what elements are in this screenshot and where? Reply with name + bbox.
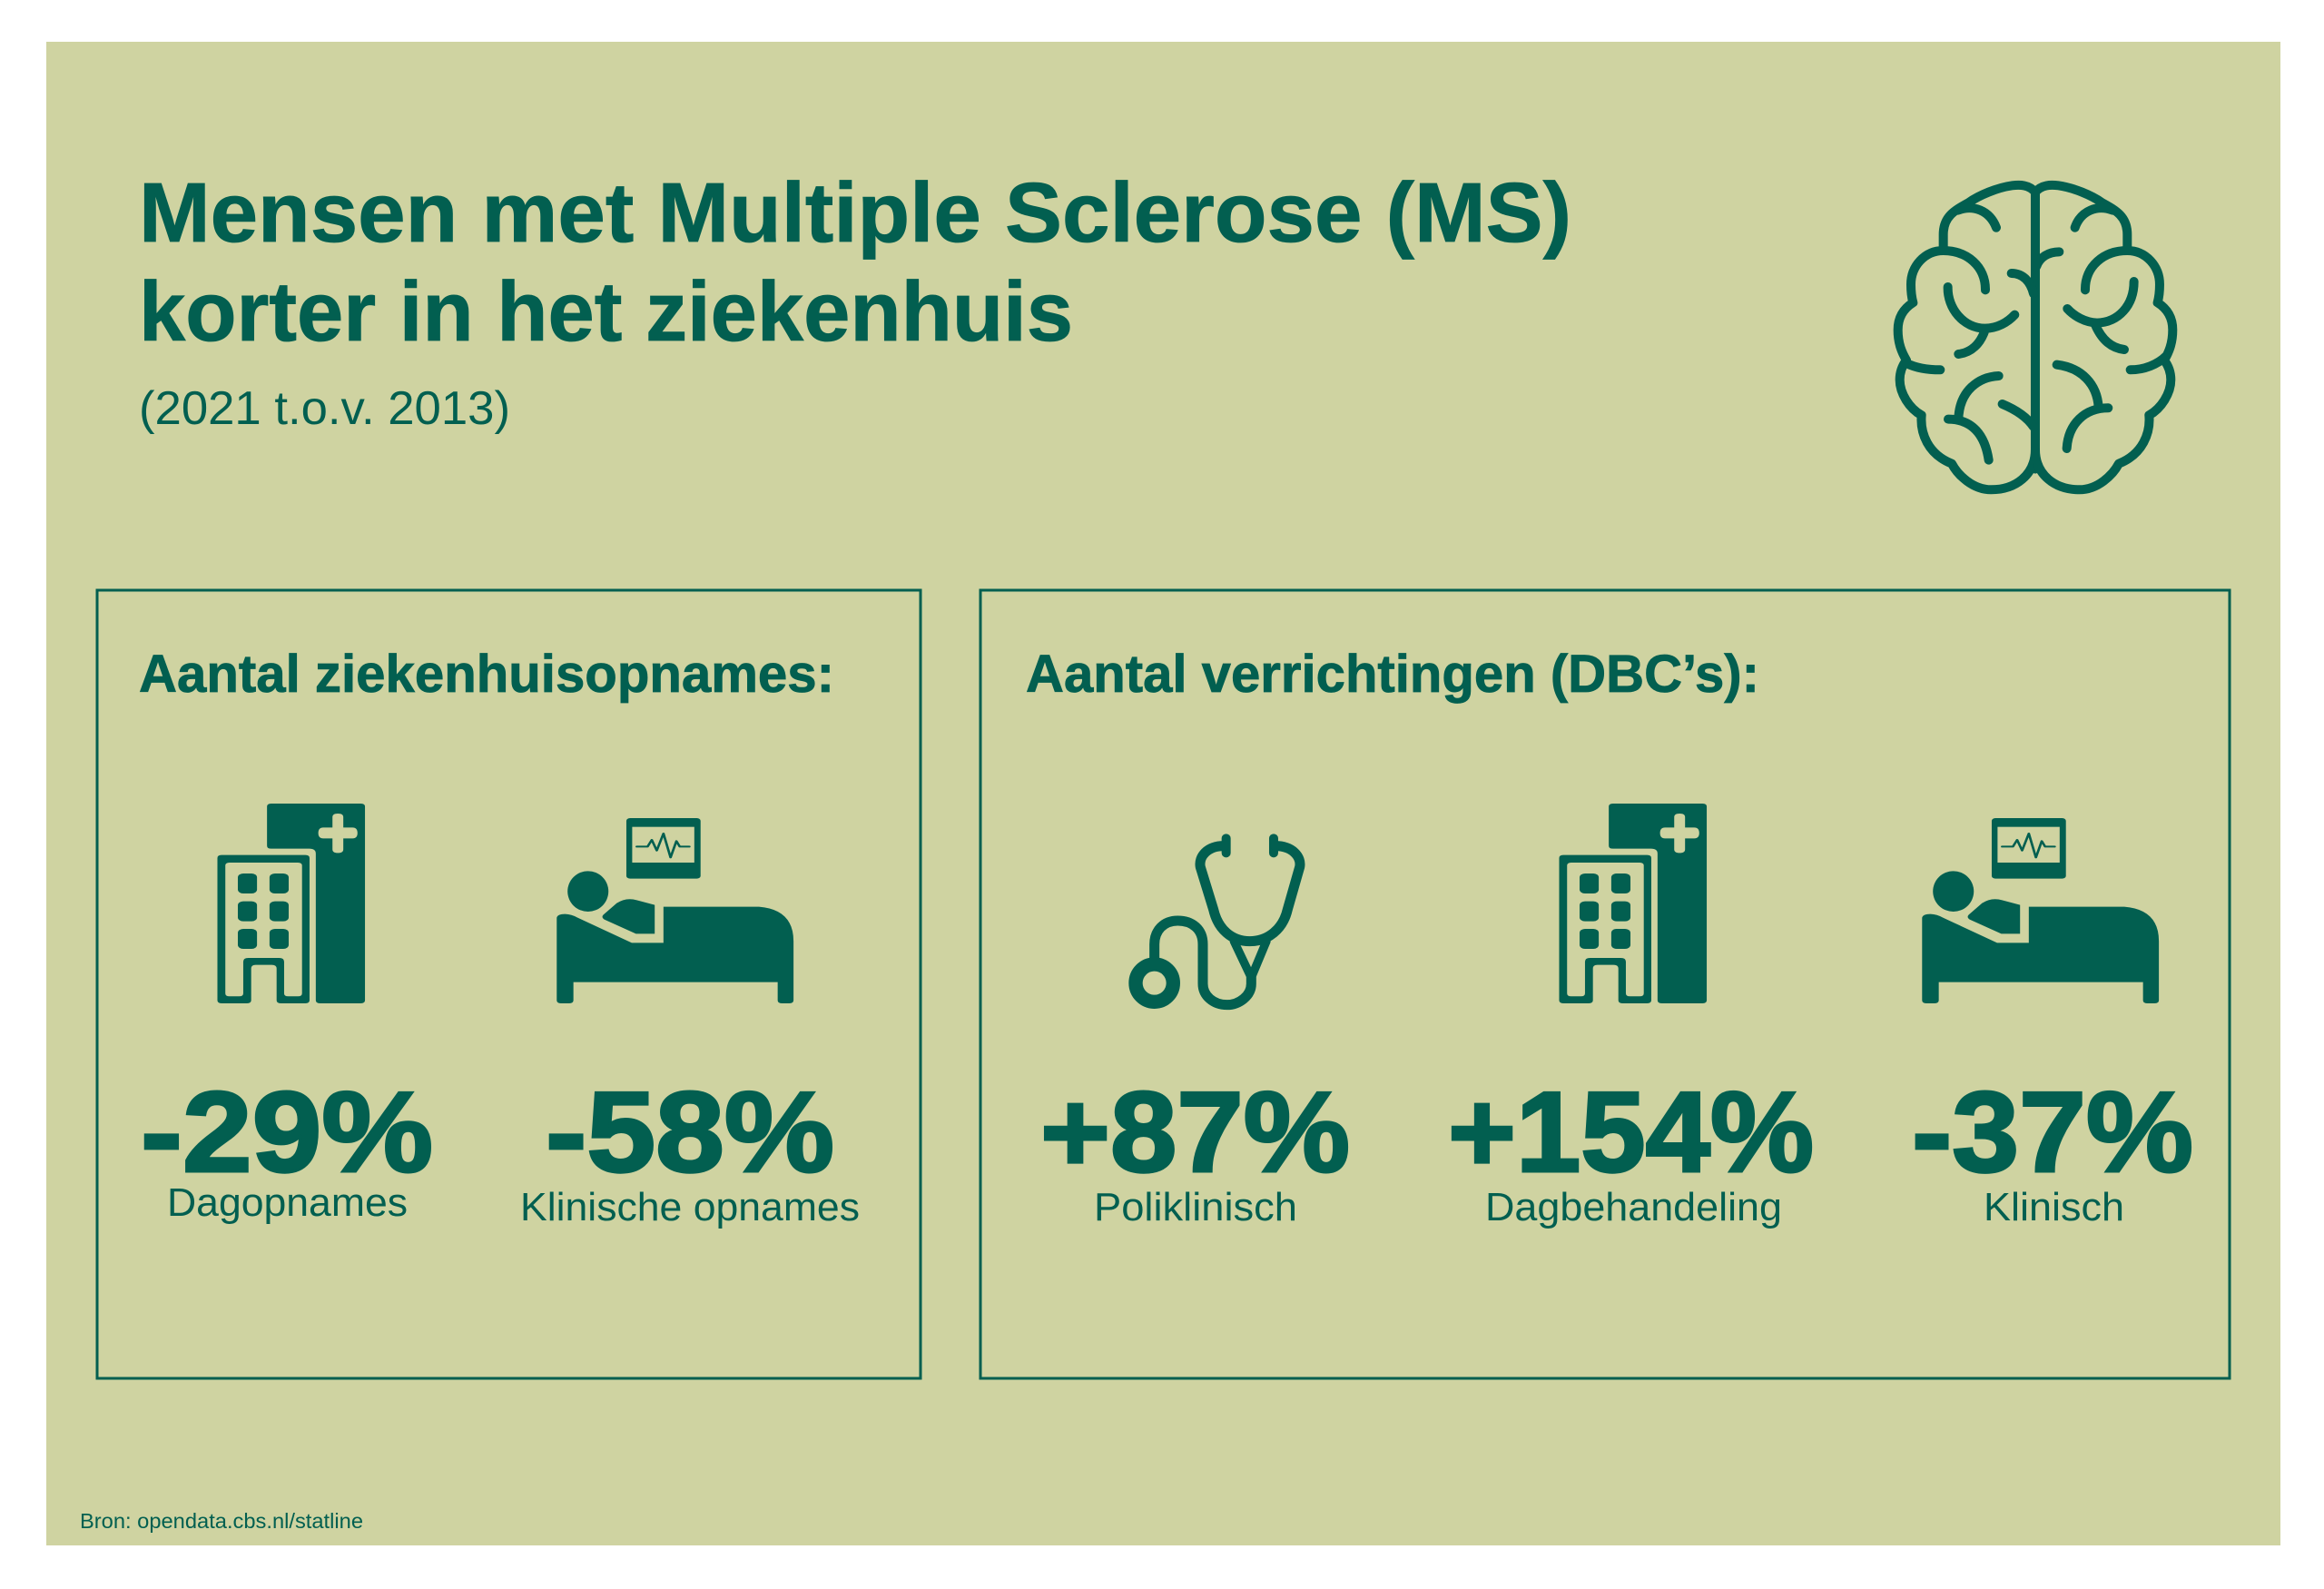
title: Mensen met Multiple Sclerose (MS) [139, 165, 1571, 260]
title: korter in het ziekenhuis [139, 264, 1073, 359]
icon: brain [1898, 185, 2172, 489]
stat: dagopnames: -29% [141, 1068, 433, 1196]
stat: poliklinisch: +87% [1040, 1068, 1350, 1196]
stat: klinische opnames: -58% [546, 1068, 834, 1196]
stat: klinisch: Klinisch [1984, 1185, 2124, 1229]
heading: aantal verrichtingen: Aantal verrichtingen (DBC’s): [1026, 645, 1759, 704]
stat: dagbehandeling: Dagbehandeling [1485, 1185, 1782, 1229]
stat: poliklinisch: Poliklinisch [1094, 1185, 1297, 1229]
stat: klinisch: -37% [1912, 1068, 2193, 1196]
stat: dagbehandeling: +154% [1448, 1068, 1814, 1196]
icon: patient in bed [1922, 818, 2159, 1003]
panel: verrichtingen [980, 590, 2230, 1378]
icon: hospital [1559, 804, 1707, 1003]
icon: patient in bed [556, 818, 793, 1003]
stat: klinische opnames [520, 1068, 860, 1229]
icon: hospital [217, 804, 365, 1003]
subtitle: (2021 t.o.v. 2013) [139, 382, 510, 435]
stat: klinische opnames: Klinische opnames [520, 1185, 860, 1229]
stat: dagopnames: Dagopnames [167, 1180, 408, 1225]
panel: ziekenhuisopnames [97, 590, 921, 1378]
title [139, 165, 1571, 359]
icon: stethoscope [1136, 834, 1300, 1005]
source note: Bron: opendata.cbs.nl/statline [80, 1509, 363, 1533]
heading: aantal ziekenhuisopnames: Aantal ziekenhuisopnames: [139, 645, 834, 704]
